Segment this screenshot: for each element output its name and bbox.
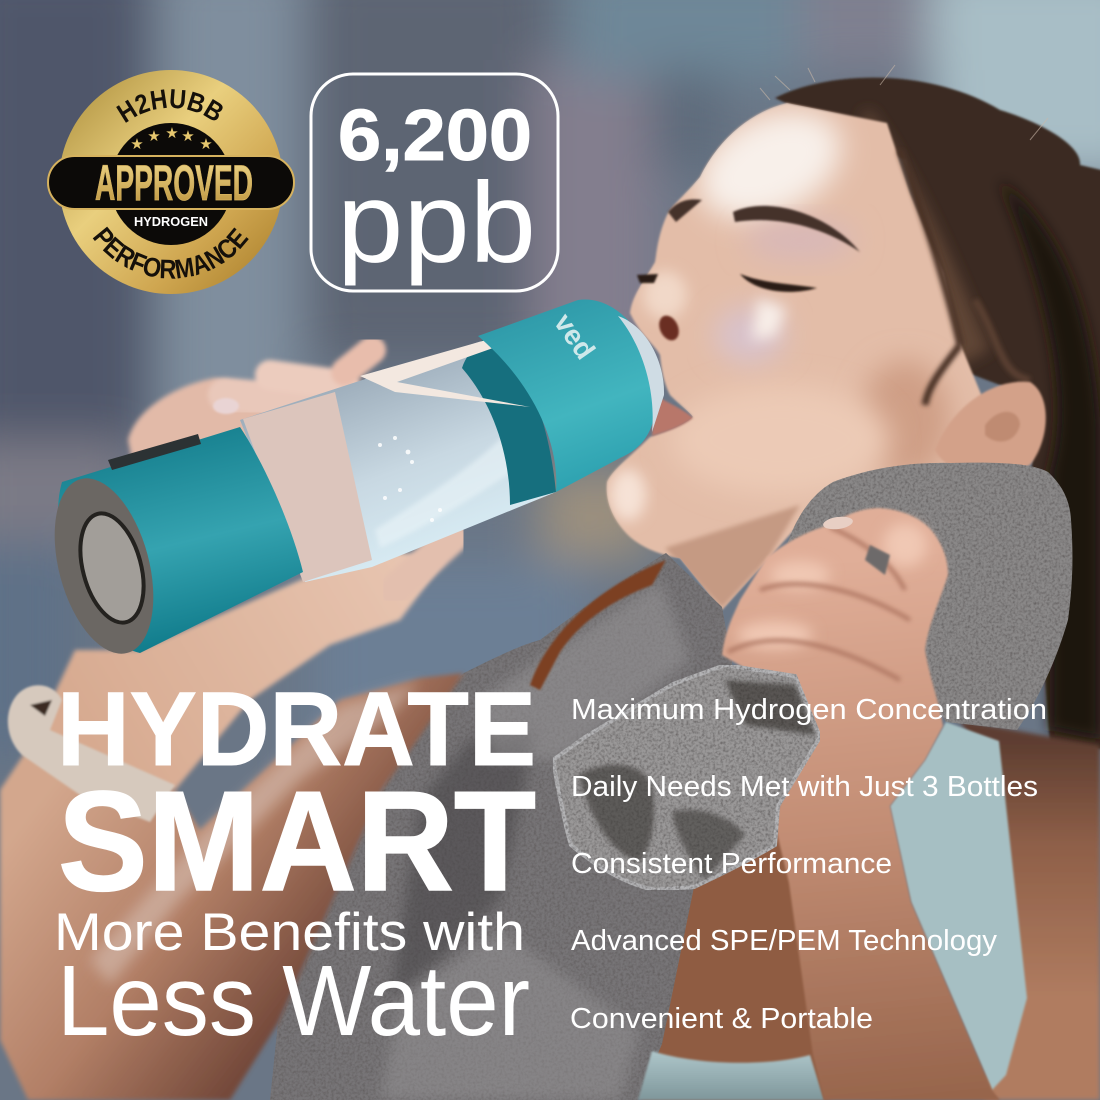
bra strap [890,722,1027,1090]
bottle: dark water [462,335,556,505]
subheading: More Benefits with: More Benefits with [54,903,525,962]
towel: main drape [270,553,735,1100]
face: neck shade [665,505,800,608]
bottle: base label [69,506,155,630]
face: forehead light [686,103,854,232]
badge: stars [130,124,213,153]
heading: HYDRATE: HYDRATE [57,671,536,788]
towel: upper light patch [480,580,690,760]
badge: gold disc [59,70,283,294]
face: purple shade [715,307,785,363]
badge: stars: ★ [147,127,161,145]
face: brow shade [760,222,842,258]
woman: hair strands [900,150,1030,405]
badge: H2HUBB: H2HUBB [116,89,223,123]
bottle: water swirl [375,430,515,548]
hand: back of hand [128,378,330,500]
woman: right shoulder skin [960,720,1100,1100]
hand: fingers [225,350,372,402]
woman: nostril [655,312,683,344]
towel: patch between fingers [865,545,890,575]
bottle: display slot [108,434,201,470]
woman: hand and forearm [722,508,1000,1100]
bottle: base disc [37,467,171,665]
badge: hydrogen label: HYDROGEN [134,215,208,229]
callout unit: ppb [337,160,536,287]
bottle: upper teal sleeve [478,299,656,492]
badge: black centre [110,123,232,245]
badge [47,70,295,294]
headline block [54,671,536,1057]
badge: stars: ★ [199,135,213,153]
callout frame [311,74,558,291]
woman: nail [822,515,854,531]
benefit 5: Convenient & Portable [570,1003,873,1035]
face: jaw warm [670,385,890,495]
benefit 1: Maximum Hydrogen Concentration [571,694,1047,726]
hand: finger highlights [737,523,927,649]
face: chin light [610,469,646,521]
woman: ear [935,382,1046,474]
bottle: clear tube [240,335,556,582]
hair tuft on towel [530,560,666,690]
benefit 2: Daily Needs Met with Just 3 Bottles [571,771,1038,803]
woman: finger creases [728,527,910,680]
arm: lower limb [0,673,464,1100]
hair: fly-away strands [760,65,1048,140]
face: sun spot [752,298,786,340]
towel: dark stripe [390,730,535,1000]
badge: stars: ★ [165,124,179,142]
badge: PERFORMANCE: PERFORMANCE [92,226,249,279]
bottle: logo text: ved [548,308,601,365]
bottle [37,299,664,665]
bottle: bubbles [378,436,442,522]
bottle-side arms [0,350,464,1100]
benefits list [570,694,1047,1035]
watch band [8,685,175,822]
arm: forearm to hand [30,550,445,790]
benefit 4: Advanced SPE/PEM Technology [571,925,998,957]
hand: nail [213,398,239,414]
woman: lips [652,395,693,436]
woman: hair [760,65,1100,750]
badge: approved text: APPROVED [95,155,253,211]
face: cheek shade [860,360,950,480]
woman: chest [640,820,830,1100]
woman: closed eye [637,274,817,292]
watch: buckle hole [30,700,52,716]
woman: eyebrows [668,199,860,252]
badge: stars: ★ [130,135,144,153]
subheading: Less Water: Less Water [57,945,530,1057]
fold interior shadow [578,765,654,862]
heading: SMART: SMART [58,762,536,921]
hand: thumb [395,538,452,590]
badge: black ribbon [48,156,294,209]
benefit 3: Consistent Performance [571,848,892,880]
badge: stars: ★ [181,127,195,145]
towel: light patch [380,930,640,1100]
towel: folded end [553,665,820,890]
face: nose light [643,271,687,319]
bottle: lower teal sleeve [58,427,303,653]
bottle: straw highlight [360,336,530,407]
bra hem [638,1051,824,1100]
towel: right side [787,463,1072,730]
callout number: 6,200 [338,96,532,176]
woman: face and neck [607,90,1000,610]
bottle: cap rim [618,316,664,432]
arm: elbow highlight [90,682,420,985]
bottle: pink reflection band [243,392,372,582]
callout: 6,200 ppb [311,74,558,291]
